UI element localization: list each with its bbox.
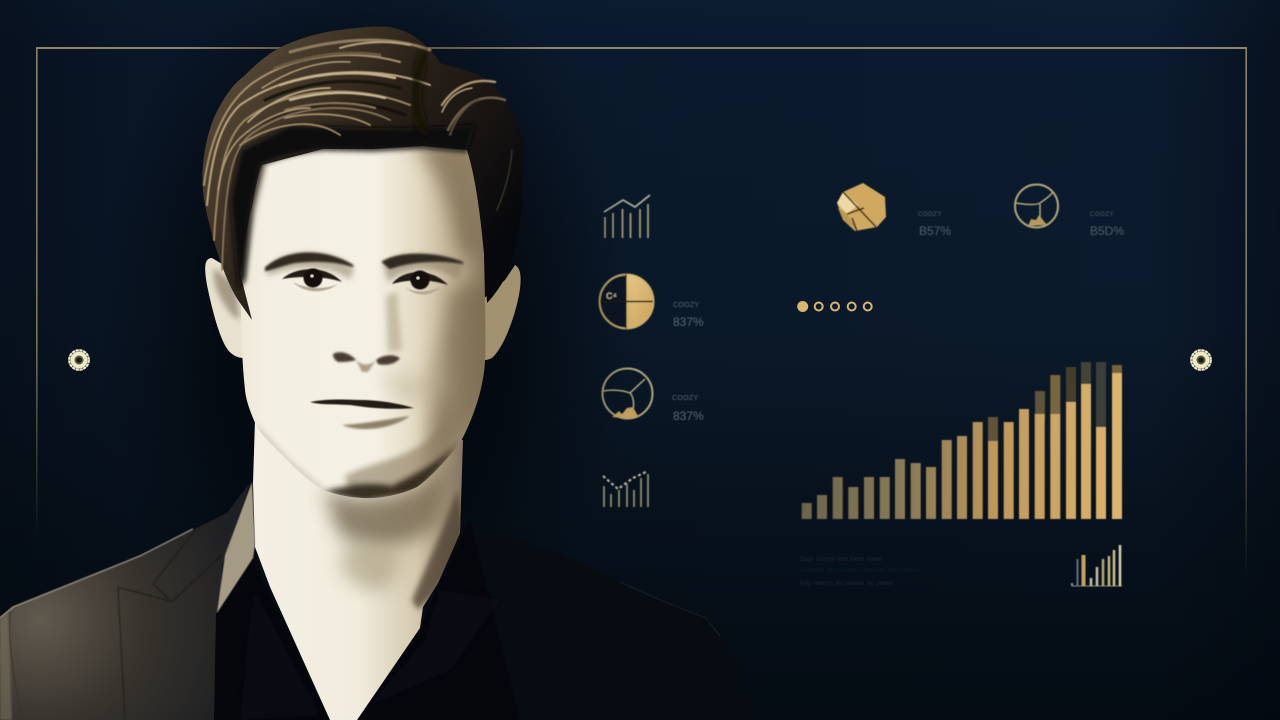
footnote text: Quarterly performance summary and analysis: [800, 568, 921, 574]
pagination dots: [797, 301, 872, 312]
main bars: [802, 373, 1122, 519]
face shading: [240, 140, 490, 502]
gear icon: right: [1191, 350, 1211, 370]
neck: [253, 420, 465, 720]
right eye: [383, 254, 463, 294]
upper bar segments: [988, 362, 1122, 447]
nose: [333, 352, 400, 372]
stat block: half pie: COOZY: [673, 302, 699, 309]
footnote text: Key metrics for review, by period: [800, 580, 894, 587]
icon: faceted gold pie: [837, 183, 886, 231]
icon: dotted line and bar chart: [603, 471, 648, 507]
shirt: [214, 520, 520, 720]
dark halo behind head: [95, 0, 635, 690]
gold frame: [36, 47, 1247, 577]
icon: half gold pie: C⁴: [606, 291, 617, 301]
portrait: [0, 0, 758, 720]
icon: half gold pie: [600, 274, 654, 329]
icon: ring chart top right: [1015, 184, 1058, 228]
stat block: ring chart left: [672, 395, 704, 423]
stat block: ring chart top right: [1090, 212, 1124, 238]
footnote text: Data source and trend notes: [800, 556, 883, 563]
ear left: [205, 258, 250, 358]
shirt collar left: [217, 482, 255, 613]
stat block: faceted pie: [918, 212, 951, 238]
jacket right side: [215, 500, 758, 720]
hair strands: [204, 40, 512, 270]
footnote text: [800, 556, 921, 587]
stat block: ring chart top right: COOZY: [1090, 212, 1114, 218]
stat block: faceted pie: COOZY: [918, 212, 942, 218]
ear right: [482, 265, 521, 360]
jacket left side: [0, 483, 250, 720]
gear icon: left: [69, 350, 89, 370]
shirt collar fold: [240, 590, 500, 720]
jacket shoulder highlight: [620, 582, 720, 636]
stat block: ring chart top right: B5D%: [1090, 224, 1124, 238]
icon: line and bar chart top: [604, 195, 650, 238]
left eye: [266, 252, 354, 291]
stat block: half pie: [673, 302, 704, 329]
mouth: [310, 400, 414, 429]
icon: ring chart left: [602, 368, 652, 419]
mini bar chart: [1072, 545, 1122, 586]
stat block: ring chart left: 837%: [673, 409, 704, 423]
bar chart: [802, 362, 1122, 519]
stat block: faceted pie: B57%: [919, 224, 951, 238]
stat block: ring chart left: COOZY: [672, 395, 698, 402]
hair: [202, 27, 523, 320]
stat block: half pie: 837%: [673, 315, 704, 329]
face: [240, 145, 485, 498]
